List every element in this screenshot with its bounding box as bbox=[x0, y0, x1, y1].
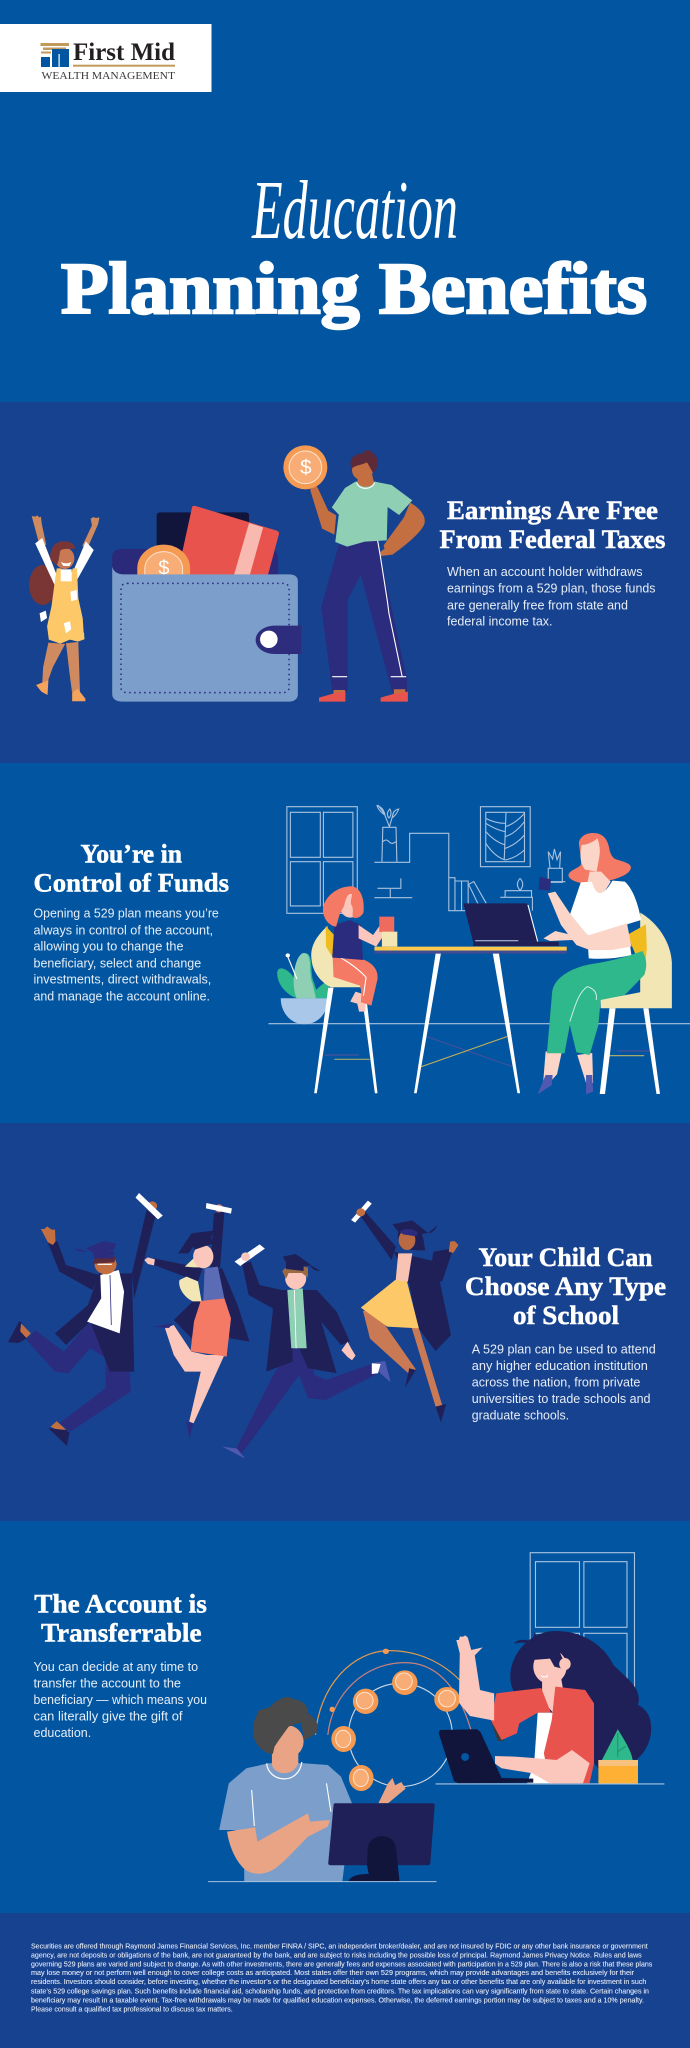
man holding coin bbox=[283, 445, 425, 702]
woman in chair bbox=[538, 833, 672, 1094]
heading: Earnings Are Free bbox=[447, 496, 658, 525]
body text: education. bbox=[34, 1725, 91, 1740]
body text bbox=[34, 1659, 207, 1740]
body text bbox=[34, 906, 219, 1003]
disclosure text: beneficiary may result in a taxable event. Tax-free withdrawals may be made for qualified education expenses. Otherwise, the deferred earnings portion may be subject to taxes and a 10% penalty. bbox=[31, 1998, 644, 2005]
panel: choose any type of school bbox=[0, 1123, 690, 1521]
body text: beneficiary — which means you bbox=[34, 1692, 207, 1707]
body text: federal income tax. bbox=[447, 614, 552, 629]
logo bbox=[0, 24, 212, 92]
heading: Control of Funds bbox=[34, 869, 229, 898]
woman with laptop bbox=[436, 1631, 664, 1784]
coin arcs bbox=[315, 1649, 471, 1787]
title: Planning Benefits: Planning Benefits bbox=[61, 248, 647, 329]
disclosure text: agency, are not deposits or obligations of the bank, are not guaranteed by the bank, and are subject to risks including the possible loss of principal. Raymond James Privacy Notice. Rules and laws bbox=[31, 1952, 642, 1959]
body text: always in control of the account, bbox=[34, 922, 213, 937]
body text: Opening a 529 plan means you’re bbox=[34, 906, 219, 921]
disclosure text: residents. Investors should consider, before investing, whether the investor’s or the designated beneficiary’s home state offers any tax or other benefits that are only available for investment in such bbox=[31, 1979, 646, 1986]
body text: transfer the account to the bbox=[34, 1676, 181, 1691]
body text bbox=[447, 564, 656, 629]
child on stool bbox=[311, 886, 387, 1093]
heading: You’re in bbox=[80, 840, 183, 869]
disclosure text: Securities are offered through Raymond James Financial Services, Inc. member FINRA / SIPC, an independent broker/dealer, and are not insured by FDIC or any other bank insurance or government bbox=[31, 1943, 648, 1950]
heading: Your Child Can bbox=[478, 1243, 653, 1272]
logo: First Mid bbox=[73, 37, 175, 66]
table with laptop and boxes bbox=[325, 903, 650, 1093]
illustration: four jumping graduates bbox=[8, 1193, 458, 1459]
heading bbox=[440, 496, 666, 554]
room line drawing bbox=[268, 805, 690, 1024]
body text: and manage the account online. bbox=[34, 988, 210, 1003]
logo: WEALTH MANAGEMENT bbox=[42, 71, 176, 82]
body text: allowing you to change the bbox=[34, 939, 184, 954]
disclosure text: Please consult a qualified tax professional to discuss tax matters. bbox=[31, 2007, 233, 2014]
illustration: two people passing coins bbox=[208, 1553, 664, 1882]
disclosure text: state’s 529 college savings plan. Such benefits include financial aid, scholarship funds, and protection from creditors. The tax implications can vary significantly from state to state. Certain changes in bbox=[31, 1989, 649, 1996]
body text: A 529 plan can be used to attend bbox=[472, 1341, 656, 1356]
body text: beneficiary, select and change bbox=[34, 955, 201, 970]
heading bbox=[465, 1243, 666, 1330]
body text: can literally give the gift of bbox=[34, 1709, 183, 1724]
window bbox=[530, 1553, 634, 1689]
graduate 3 bbox=[222, 1244, 391, 1459]
body text: any higher education institution bbox=[472, 1358, 648, 1373]
plant bbox=[277, 953, 329, 1024]
heading: From Federal Taxes bbox=[440, 525, 666, 554]
wallet bbox=[112, 506, 301, 702]
body text: When an account holder withdraws bbox=[447, 564, 643, 579]
wallet: $ bbox=[158, 556, 169, 579]
body text: universities to trade schools and bbox=[472, 1391, 650, 1406]
title: Education script: Education bbox=[251, 164, 458, 257]
graduate 2 bbox=[144, 1203, 249, 1439]
body text: graduate schools. bbox=[472, 1408, 569, 1423]
disclosure text: may lose money or not perform well enough to cover college costs as anticipated. Most states offer their own 529 programs, which may provide advantages and benefits exclusively for their bbox=[31, 1970, 635, 1977]
disclosure text: governing 529 plans are varied and subject to change. As with other investments, there are generally fees and expenses associated with participation in a 529 plan. There is also a risk that these plans bbox=[31, 1961, 653, 1968]
body text: You can decide at any time to bbox=[34, 1659, 198, 1674]
graduate 1 bbox=[8, 1193, 163, 1446]
body text: earnings from a 529 plan, those funds bbox=[447, 581, 656, 596]
heading: of School bbox=[513, 1301, 619, 1330]
panel: earnings are free from federal taxes bbox=[0, 402, 690, 763]
illustration: girl, wallet and man with coin bbox=[29, 445, 425, 702]
illustration: mother and child at table bbox=[268, 805, 690, 1094]
heading bbox=[34, 840, 229, 898]
girl bbox=[29, 515, 99, 701]
panel: account is transferrable bbox=[0, 1521, 690, 1913]
heading: Transferrable bbox=[41, 1618, 202, 1647]
body text bbox=[472, 1341, 656, 1423]
heading: Choose Any Type bbox=[465, 1272, 666, 1301]
body text: are generally free from state and bbox=[447, 597, 628, 612]
disclosure text bbox=[31, 1943, 653, 2014]
coins bbox=[331, 1670, 460, 1791]
body text: across the nation, from private bbox=[472, 1375, 640, 1390]
graduate 4 bbox=[351, 1201, 458, 1422]
panel: disclosures footer bbox=[0, 1913, 690, 2048]
heading bbox=[34, 1589, 207, 1647]
heading: The Account is bbox=[34, 1589, 207, 1618]
man holding coin: $ bbox=[300, 456, 312, 479]
body text: investments, direct withdrawals, bbox=[34, 972, 211, 987]
panel: header bbox=[0, 0, 690, 403]
panel: in control of funds bbox=[0, 763, 690, 1123]
man at monitor bbox=[208, 1697, 436, 1882]
